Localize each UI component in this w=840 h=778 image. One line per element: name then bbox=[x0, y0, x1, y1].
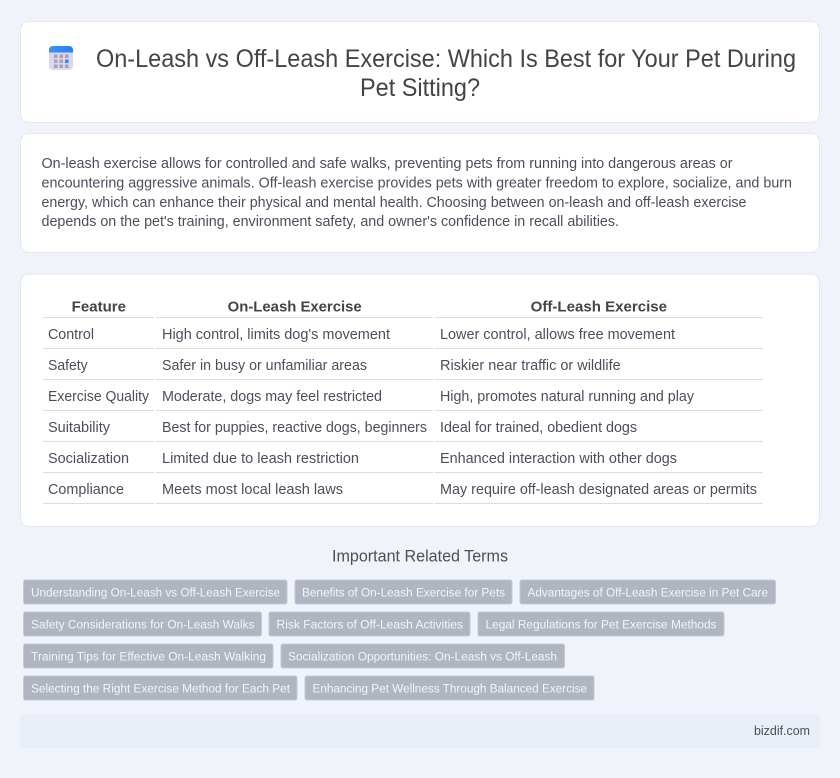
tag bbox=[24, 612, 262, 636]
row: socialization: Socialization bbox=[48, 451, 129, 467]
footer source text: bizdif.com bbox=[754, 724, 810, 738]
panel: comparison table bbox=[20, 274, 820, 526]
table header bbox=[43, 300, 763, 318]
tag bbox=[281, 644, 564, 668]
row: suitability: Ideal for trained, obedient dogs bbox=[440, 420, 637, 436]
icon: calendar bbox=[49, 46, 73, 70]
tag: Safety Considerations for On-Leash Walks bbox=[31, 617, 254, 631]
row: suitability: Suitability bbox=[48, 420, 111, 436]
table header: Off-Leash Exercise bbox=[531, 300, 667, 316]
footer bar bbox=[20, 714, 820, 748]
table header: On-Leash Exercise bbox=[228, 300, 362, 316]
tag: Socialization Opportunities: On-Leash vs Off-Leash bbox=[288, 649, 557, 663]
row: compliance: Compliance bbox=[48, 482, 124, 498]
related term tags bbox=[24, 580, 776, 700]
row: safety: Riskier near traffic or wildlife bbox=[440, 358, 621, 374]
tag: Enhancing Pet Wellness Through Balanced Exercise bbox=[312, 681, 587, 695]
row: compliance bbox=[43, 482, 763, 504]
tag bbox=[478, 612, 724, 636]
row: compliance: May require off-leash designated areas or permits bbox=[440, 482, 757, 498]
title text: Pet Sitting? bbox=[360, 74, 480, 102]
row: socialization: Enhanced interaction with other dogs bbox=[440, 451, 677, 467]
row: safety bbox=[43, 358, 763, 380]
tag bbox=[24, 644, 273, 668]
row: safety: Safety bbox=[48, 358, 88, 374]
tag bbox=[305, 676, 594, 700]
row: control: Control bbox=[48, 327, 94, 343]
row: control bbox=[43, 327, 763, 349]
tag: Advantages of Off-Leash Exercise in Pet Care bbox=[528, 585, 768, 599]
tag bbox=[24, 580, 287, 604]
panel: description bbox=[20, 134, 820, 252]
row: suitability: Best for puppies, reactive dogs, beginners bbox=[162, 420, 427, 436]
tag: Training Tips for Effective On-Leash Walking bbox=[31, 649, 266, 663]
title text bbox=[96, 45, 796, 102]
row: socialization bbox=[43, 451, 763, 473]
row: exercise quality bbox=[43, 389, 763, 411]
row: suitability bbox=[43, 420, 763, 442]
description paragraph: energy, which can enhance their physical and mental health. Choosing between on-leash and off-leash exercise bbox=[42, 195, 746, 211]
panel: title bbox=[20, 22, 820, 122]
description paragraph: On-leash exercise allows for controlled and safe walks, preventing pets from running into dangerous areas or bbox=[42, 156, 733, 172]
table header: Feature bbox=[72, 300, 126, 316]
row: exercise quality: High, promotes natural running and play bbox=[440, 389, 695, 405]
tag bbox=[269, 612, 470, 636]
tag bbox=[295, 580, 512, 604]
heading: important related terms: Important Related Terms bbox=[332, 548, 508, 566]
tag: Legal Regulations for Pet Exercise Methods bbox=[486, 617, 716, 631]
row: exercise quality: Exercise Quality bbox=[48, 389, 150, 405]
row: control: High control, limits dog's movement bbox=[162, 327, 390, 343]
title text: On-Leash vs Off-Leash Exercise: Which Is Best for Your Pet During bbox=[96, 45, 796, 73]
row: socialization: Limited due to leash restriction bbox=[162, 451, 359, 467]
tag: Benefits of On-Leash Exercise for Pets bbox=[302, 585, 505, 599]
tag: Selecting the Right Exercise Method for Each Pet bbox=[31, 681, 291, 695]
description paragraph bbox=[42, 156, 792, 230]
tag bbox=[24, 676, 297, 700]
tag: Risk Factors of Off-Leash Activities bbox=[276, 617, 463, 631]
description paragraph: encountering aggressive animals. Off-leash exercise provides pets with greater freedom to explore, socialize, and burn bbox=[42, 175, 792, 191]
row: exercise quality: Moderate, dogs may feel restricted bbox=[162, 389, 382, 405]
row: compliance: Meets most local leash laws bbox=[162, 482, 343, 498]
description paragraph: depends on the pet's training, environment safety, and owner's confidence in recall abilities. bbox=[42, 214, 619, 230]
row: safety: Safer in busy or unfamiliar areas bbox=[162, 358, 367, 374]
tag bbox=[520, 580, 776, 604]
row: control: Lower control, allows free movement bbox=[440, 327, 675, 343]
tag: Understanding On-Leash vs Off-Leash Exercise bbox=[31, 585, 280, 599]
